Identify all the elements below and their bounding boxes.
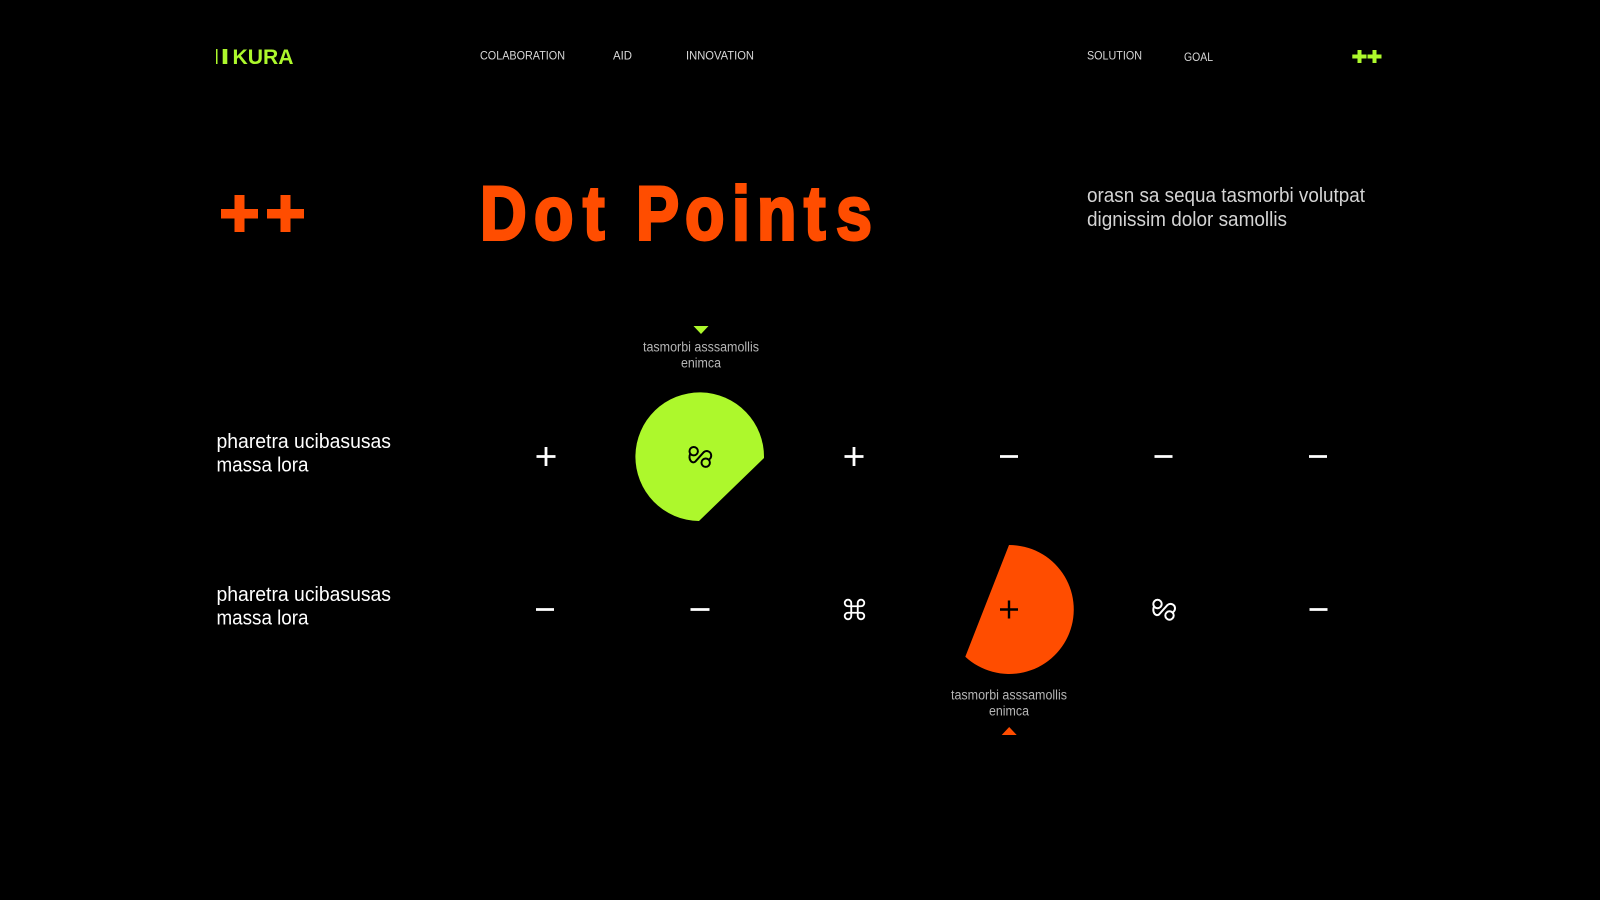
icon: header double plus <box>1352 50 1382 63</box>
row label 1 <box>216 431 391 476</box>
row 1 dot points <box>536 392 1327 521</box>
navigation links: GOAL <box>1184 50 1213 64</box>
navigation links <box>480 48 1213 64</box>
icon: plus <box>844 447 864 466</box>
title: Dot Points <box>480 171 872 256</box>
row label 1: massa lora <box>216 454 309 476</box>
icon: link loops <box>1153 600 1175 620</box>
row label 1: pharetra ucibasusas <box>216 431 391 453</box>
navigation links: AID <box>613 48 632 62</box>
icon: link loops <box>690 447 711 467</box>
navigation links: COLABORATION <box>480 48 565 62</box>
icon: command symbol <box>845 600 864 619</box>
icon: large double plus <box>221 195 304 232</box>
callout: green marker and caption: enimca <box>681 356 721 370</box>
callout: green marker and caption: tasmorbi asssamollis <box>643 340 759 354</box>
navigation links: SOLUTION <box>1087 48 1142 62</box>
row label 2: massa lora <box>216 608 309 630</box>
icon: minus <box>536 608 554 611</box>
icon: minus <box>690 608 710 611</box>
highlighted orange dot <box>965 545 1074 674</box>
row label 2: pharetra ucibasusas <box>216 584 391 606</box>
icon: minus <box>1310 608 1328 611</box>
icon: plus <box>1000 600 1018 618</box>
callout: green marker and caption <box>643 326 759 370</box>
icon: plus <box>536 447 556 466</box>
icon: minus <box>1154 455 1172 458</box>
icon: minus <box>1000 455 1018 458</box>
callout: orange caption and marker: enimca <box>989 704 1029 718</box>
subtitle text block <box>1087 185 1365 231</box>
callout: orange caption and marker: tasmorbi asssamollis <box>951 688 1067 702</box>
logo: IKURA: KURA <box>232 46 294 69</box>
row 2 dot points <box>536 545 1328 674</box>
row label 2 <box>216 584 391 630</box>
subtitle text block: orasn sa sequa tasmorbi volutpat <box>1087 185 1365 207</box>
icon: minus <box>1309 455 1327 458</box>
navigation links: INNOVATION <box>686 48 754 62</box>
subtitle text block: dignissim dolor samollis <box>1087 209 1287 231</box>
highlighted green dot <box>635 392 764 521</box>
callout: orange caption and marker <box>951 688 1067 735</box>
